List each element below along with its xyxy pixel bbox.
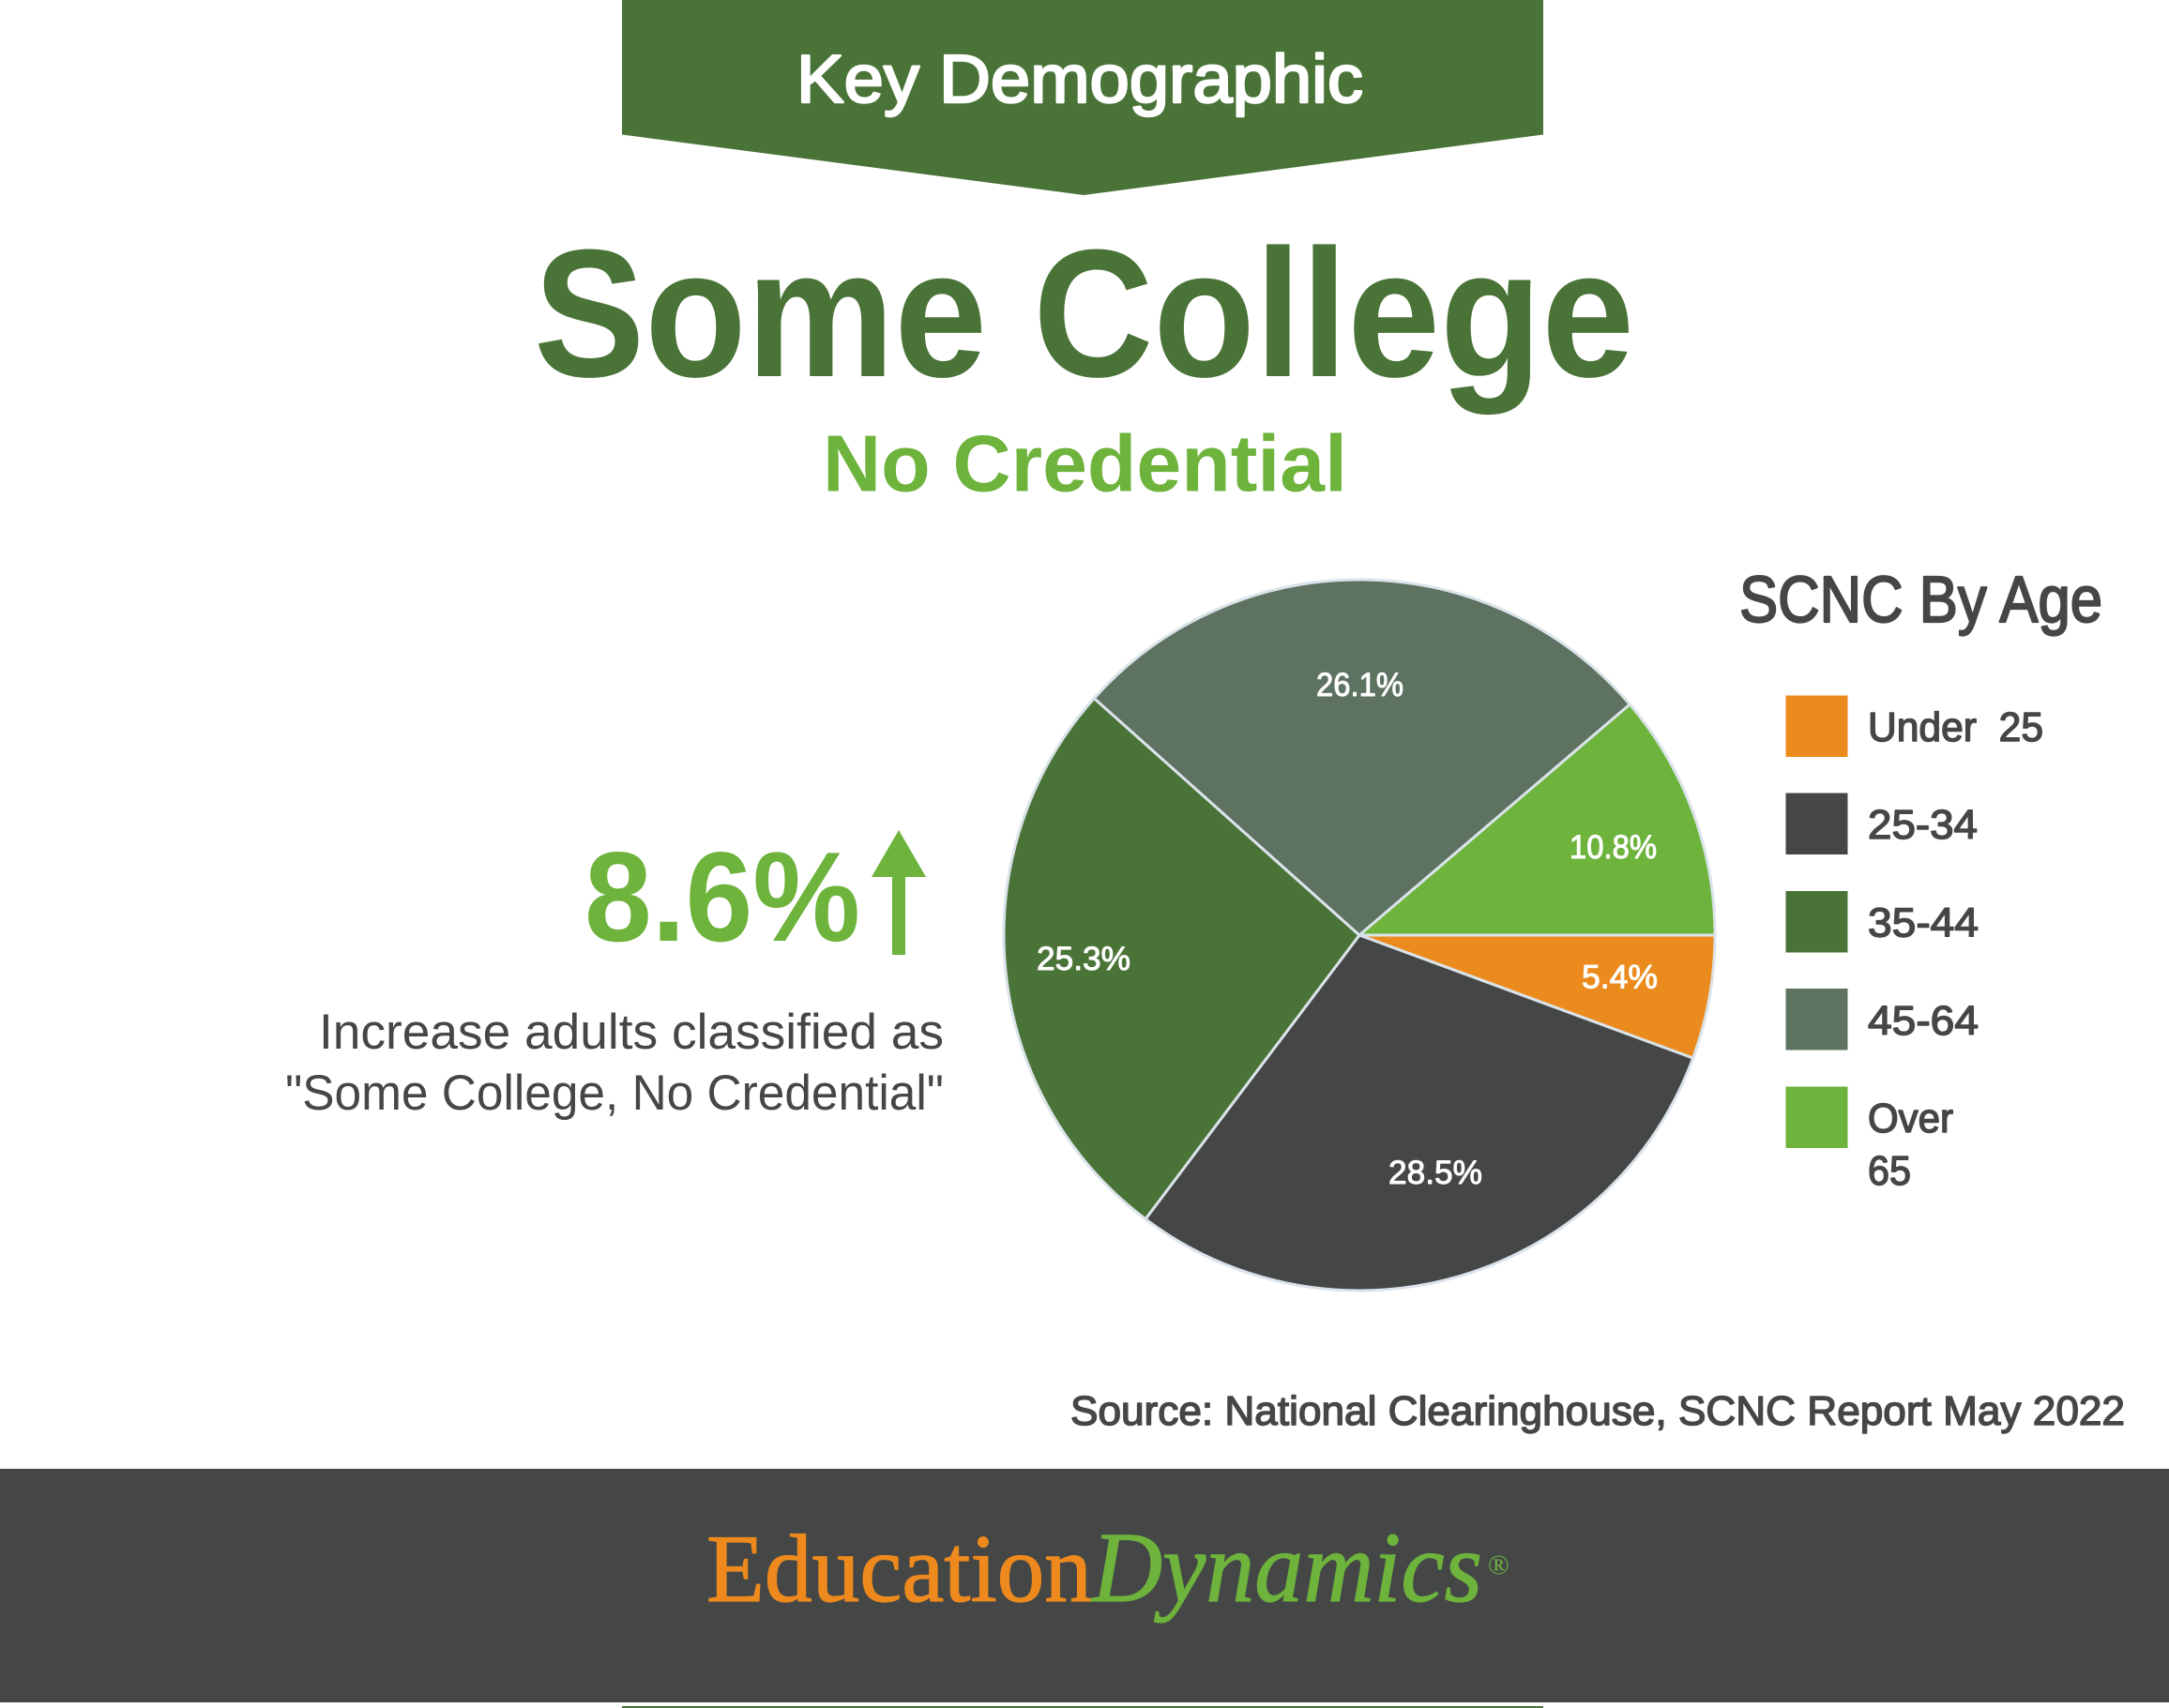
slice: over 65	[1359, 704, 1715, 935]
legend title: SCNC By Age	[1739, 563, 2102, 636]
stat description: Increase adults classified as	[319, 1005, 944, 1060]
pie value labels	[1037, 667, 1658, 1191]
main title: Some College	[534, 212, 1634, 416]
footer logo: ®	[1488, 1549, 1509, 1580]
subtitle: No Credential	[823, 420, 1347, 508]
legend item: 25-34	[1786, 794, 1978, 854]
legend item: 45-64: 45-64	[1868, 998, 1979, 1044]
icon: up arrow	[872, 830, 926, 955]
legend item: under 25: Under 25	[1868, 704, 2043, 750]
footer logo: Dynamics	[1090, 1513, 1482, 1624]
pie value labels: 26.1%	[1316, 667, 1403, 703]
slice: 35-44	[1004, 698, 1359, 1219]
pie value labels: 25.3%	[1037, 941, 1130, 977]
slice: under 25	[1359, 935, 1715, 1058]
footer logo	[706, 1513, 1509, 1624]
legend	[1786, 696, 2043, 1194]
stat: increase percentage: 8.6%	[584, 825, 860, 968]
legend item: under 25	[1786, 696, 2043, 757]
stat description	[285, 1005, 944, 1121]
legend item: over 65	[1786, 1086, 1953, 1194]
slice: 25-34	[1145, 935, 1693, 1291]
footer logo: Education	[706, 1516, 1092, 1623]
legend item: 35-44	[1786, 891, 1979, 953]
header banner	[622, 0, 1543, 195]
legend item: over 65: 65	[1868, 1148, 1911, 1194]
slice: 45-64	[1094, 580, 1630, 935]
pie value labels: 10.8%	[1570, 829, 1657, 866]
legend item: 35-44: 35-44	[1868, 900, 1979, 945]
legend item: 45-64	[1786, 989, 1979, 1050]
pie value labels: 28.5%	[1388, 1155, 1482, 1191]
pie chart: SCNC by age	[1004, 580, 1715, 1291]
source note: Source: National Clearinghouse, SCNC Report May 2022	[1070, 1388, 2125, 1434]
pie value labels: 5.4%	[1582, 959, 1658, 996]
stat description: "Some College, No Credential"	[285, 1066, 944, 1121]
footer band	[0, 1469, 2169, 1708]
legend item: 25-34: 25-34	[1868, 802, 1978, 848]
banner heading: Key Demographic	[796, 42, 1363, 117]
legend item: over 65: Over	[1868, 1096, 1953, 1141]
